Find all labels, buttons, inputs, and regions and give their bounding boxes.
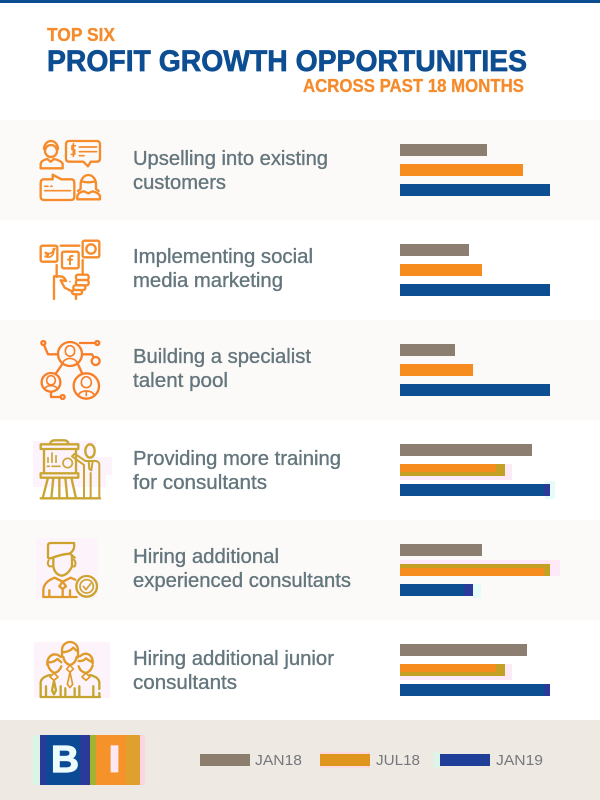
row 6: junior consultants — [34, 642, 550, 698]
row 1: upselling — [0, 120, 600, 220]
row label: Upselling into existing — [133, 148, 328, 170]
row label: experienced consultants — [133, 570, 351, 592]
footer — [0, 720, 600, 800]
row label: for consultants — [133, 472, 267, 494]
bars — [400, 444, 555, 499]
icon: talent network — [41, 341, 100, 399]
legend: JAN18 — [255, 752, 302, 769]
bars — [400, 344, 550, 396]
logo: I — [108, 739, 121, 781]
icon: presenter — [33, 440, 112, 498]
row label: Building a specialist — [133, 346, 311, 368]
row 4: training — [33, 440, 555, 499]
row label: Hiring additional — [133, 546, 279, 568]
icon: consultant team — [34, 642, 110, 698]
header — [47, 25, 527, 96]
icon: customers talking — [41, 141, 100, 200]
legend: JUL18 — [376, 752, 420, 769]
bars — [400, 544, 560, 598]
row 5: experienced consultants — [0, 520, 600, 620]
row 2: social media — [41, 241, 550, 299]
row label: Implementing social — [133, 246, 313, 268]
kicker: TOP SIX — [47, 25, 115, 45]
legend — [200, 752, 543, 769]
bars — [400, 144, 550, 196]
row label: Providing more training — [133, 448, 341, 470]
icon: consultant with check — [36, 538, 98, 598]
row label: media marketing — [133, 270, 283, 292]
top rule — [0, 0, 600, 3]
row label: customers — [133, 172, 226, 194]
title: PROFIT GROWTH OPPORTUNITIES — [47, 45, 527, 78]
bars — [400, 644, 550, 696]
row label: Hiring additional junior — [133, 648, 334, 670]
row 3: talent pool — [0, 320, 600, 420]
row label: consultants — [133, 672, 237, 694]
bars — [400, 244, 550, 296]
legend: JAN19 — [496, 752, 543, 769]
row label: talent pool — [133, 370, 228, 392]
subtitle: ACROSS PAST 18 MONTHS — [303, 76, 524, 96]
logo — [33, 735, 145, 785]
logo: B — [51, 739, 79, 781]
icon: social media hand — [41, 241, 99, 299]
